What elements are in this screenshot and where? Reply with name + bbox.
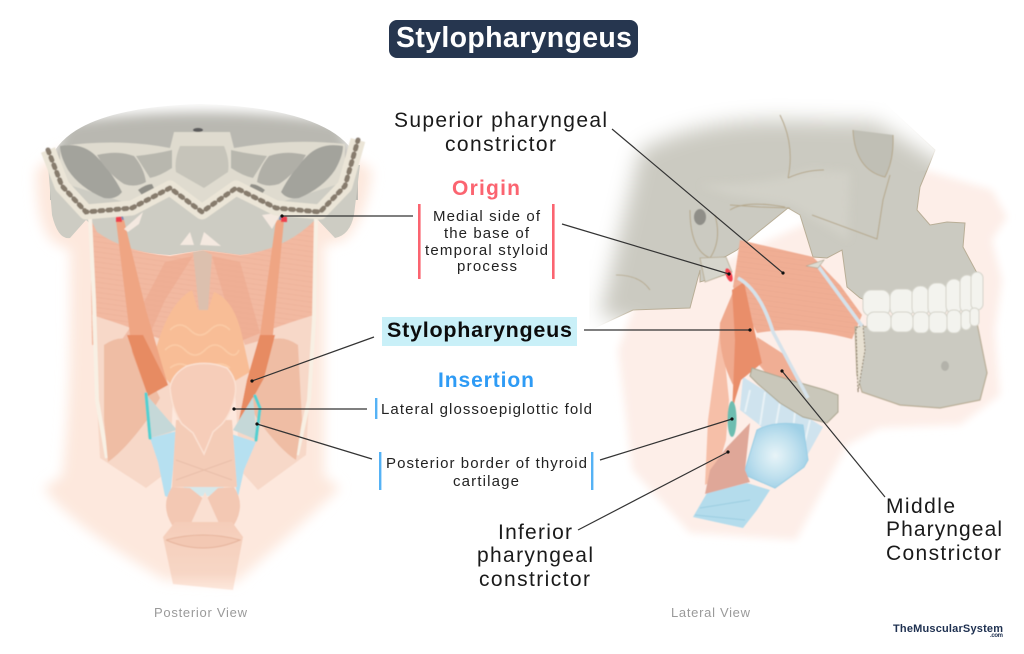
origin description: the base of (444, 225, 530, 242)
cream bone strips at the neck sides (90, 218, 316, 458)
label: middle pharyngeal constrictor: Middle (886, 495, 955, 518)
logo: TheMuscularSystem: .com (990, 633, 1003, 639)
origin marker, lateral (724, 267, 734, 283)
muscle name label: Stylopharyngeus (387, 318, 572, 342)
cricopharyngeal muscle pads (166, 487, 240, 540)
neck and shoulder skin (36, 150, 372, 583)
teeth (863, 272, 983, 333)
lateral skin background (618, 170, 1007, 540)
title: Stylopharyngeus (396, 22, 632, 54)
stylopharyngeus lateral, pale part (720, 292, 748, 385)
insertion right bracket (591, 452, 593, 490)
origin description: Medial side of (433, 208, 541, 225)
midline raphe (193, 250, 212, 310)
white foramina (124, 212, 282, 246)
heading: origin: Origin (452, 177, 520, 200)
heading: insertion: Insertion (438, 369, 534, 392)
cut mandible ramus and body (855, 323, 987, 408)
pale lower side muscles (92, 315, 314, 490)
inferior pharyngeal constrictor (705, 423, 750, 494)
insertion left bracket (379, 452, 381, 490)
orange gland / tongue mass (152, 290, 250, 385)
epiglottis (170, 363, 236, 454)
label: superior pharyngeal constrictor: Superior pharyngeal (394, 109, 607, 132)
oblique muscles flanking the gland (118, 256, 262, 345)
panel: lateral view illustration (590, 90, 1007, 540)
skull surface shading and sutures (616, 115, 893, 290)
middle pharyngeal constrictor muscle (755, 337, 808, 392)
label: middle pharyngeal constrictor: Pharyngeal (886, 518, 1002, 541)
thyrohyoid membranes (145, 393, 257, 440)
thyroid cartilage (745, 423, 808, 488)
right stylopharyngeus muscle (238, 220, 284, 425)
spongy bone band (48, 140, 358, 212)
gray skull base plate (48, 165, 360, 255)
label: inferior pharyngeal constrictor: Inferior (498, 521, 572, 544)
thyrohyoid membrane (740, 377, 823, 463)
pale inferior constrictor backdrop (705, 323, 729, 485)
insertion bar (375, 398, 377, 419)
upper skull base shading (50, 104, 358, 200)
origin left bracket (418, 204, 421, 279)
label: inferior pharyngeal constrictor: constrictor (479, 568, 590, 591)
pale blue gap (183, 487, 224, 496)
insertion text: posterior border of thyroid cartilage: Posterior border of thyroid (386, 455, 587, 472)
blue cartilages (150, 431, 256, 498)
styloid process and stylohyoid ligament (738, 278, 808, 398)
label: middle pharyngeal constrictor: Constrictor (886, 542, 1001, 565)
skull, lateral (590, 90, 977, 330)
lower pharynx muscles (172, 420, 237, 487)
origin description: process (457, 258, 517, 275)
trachea (693, 483, 770, 528)
left stylopharyngeus muscle (116, 220, 168, 396)
muscle origin markers (116, 213, 287, 222)
leader lines (232, 129, 885, 530)
caption: lateral view: Lateral View (671, 605, 751, 620)
insertion text: lateral glossoepiglottic fold: Lateral glossoepiglottic fold (381, 401, 592, 418)
hyoid bone (750, 368, 838, 423)
cross-band muscle lines (176, 460, 232, 480)
lower neck muscular band (163, 522, 243, 590)
oblique lateral muscles, lower (104, 338, 302, 462)
insertion text: posterior border of thyroid cartilage: cartilage (453, 473, 519, 490)
cyan insertion, thyroid border (146, 394, 260, 440)
sphenoid body and sinuses (60, 128, 345, 207)
caption: posterior view: Posterior View (154, 605, 248, 620)
label: inferior pharyngeal constrictor: pharyngeal (477, 544, 593, 567)
panel: posterior view illustration (36, 104, 372, 590)
origin description: temporal styloid (425, 242, 548, 259)
origin right bracket (552, 204, 555, 279)
cyan insertion, lateral (728, 401, 736, 437)
logo: TheMuscularSystem: TheMuscularSystem (893, 623, 1003, 635)
stylopharyngeus lateral, dark part (732, 282, 762, 415)
constrictor muscle, posterior (90, 218, 315, 345)
origin description (425, 208, 548, 275)
label: superior pharyngeal constrictor: constrictor (445, 133, 556, 156)
superior pharyngeal constrictor muscle (733, 240, 862, 339)
